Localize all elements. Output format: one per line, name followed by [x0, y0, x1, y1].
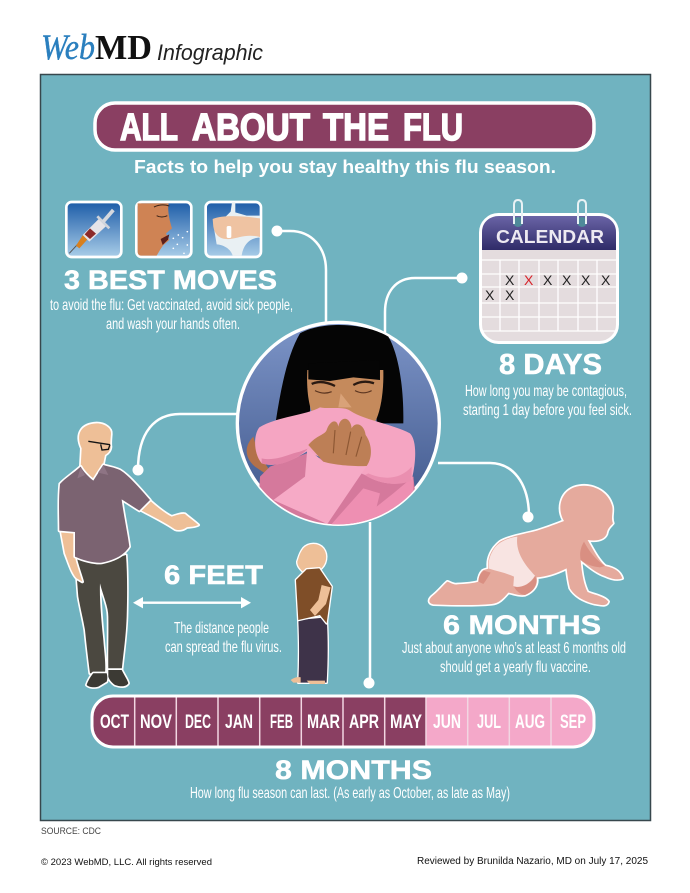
body: [259, 453, 415, 524]
logo: WebMD Infographic: Infographic: [157, 40, 263, 65]
face: [307, 370, 383, 422]
child head: [297, 544, 326, 573]
footer: copyright: © 2023 WebMD, LLC. All rights reserved: [41, 857, 212, 868]
text: 6 feet description: can spread the flu virus.: [165, 639, 282, 656]
arrow: six feet distance: [133, 597, 251, 608]
month bar: APR: [349, 712, 379, 733]
text: 6 feet description: The distance people: [174, 620, 269, 637]
source: SOURCE: CDC: [41, 826, 101, 837]
calendar: X: [543, 272, 553, 288]
text: 6 months description: should get a yearly flu vaccine.: [440, 659, 591, 676]
hair: [276, 325, 403, 423]
month bar: OCT: [100, 712, 129, 733]
month bar: MAR: [307, 712, 340, 733]
sleeve: [255, 407, 415, 484]
man head: [79, 423, 111, 481]
icon: syringe: [66, 202, 121, 257]
connector dots: [132, 226, 534, 688]
illustration: crawling baby: [429, 486, 622, 605]
logo: WebMD Infographic: Web: [41, 27, 95, 67]
title banner: [95, 103, 594, 150]
month bar: AUG: [515, 712, 545, 733]
title banner: FLU: [403, 107, 463, 149]
title banner: ABOUT: [192, 107, 310, 149]
heading: 8 months: 8 MONTHS: [275, 755, 432, 785]
child shirt: [296, 568, 332, 623]
calendar: X: [505, 272, 515, 288]
child legs: [298, 617, 328, 683]
month bar: MAY: [390, 712, 422, 733]
child arm: [310, 585, 331, 616]
footer: review credit: Reviewed by Brunilda Nazario, MD on July 17, 2025: [417, 856, 648, 867]
fingers hand: [308, 419, 371, 466]
month bar: JAN: [225, 712, 253, 733]
calendar: CALENDAR: [496, 227, 604, 247]
text: 6 months description: [402, 640, 626, 676]
subtitle: Facts to help you stay healthy this flu season.: [134, 157, 556, 177]
heading: 6 months: 6 MONTHS: [443, 610, 601, 640]
month bar: NOV: [140, 712, 172, 733]
calendar: X: [601, 272, 611, 288]
calendar: [480, 200, 618, 342]
calendar: X: [524, 272, 534, 288]
text: 8 days description: [463, 383, 632, 419]
title banner: ALL: [120, 107, 178, 149]
logo: WebMD Infographic: [41, 27, 263, 67]
illustration: tall man pointing: [59, 423, 332, 687]
man legs: [75, 555, 127, 673]
logo: WebMD Infographic: MD: [95, 28, 152, 67]
heading: 6 feet: 6 FEET: [164, 560, 264, 590]
panel: background: [40, 74, 650, 820]
child feet: [291, 677, 325, 684]
man arms: [61, 501, 198, 582]
text: best moves description: and wash your hands often.: [106, 316, 240, 333]
man shoes: [87, 670, 128, 687]
calendar: X: [581, 272, 591, 288]
text: best moves description: to avoid the flu: Get vaccinated, avoid sick people,: [50, 297, 293, 314]
connector lines: [138, 231, 529, 683]
heading: 8 days: 8 DAYS: [499, 349, 602, 381]
title banner: THE: [323, 107, 389, 149]
man shirt: [59, 465, 150, 563]
baby shading: [478, 542, 605, 595]
month bar: JUL: [477, 712, 501, 733]
left hand: [247, 437, 268, 473]
text: best moves description: [50, 297, 293, 333]
month bar: SEP: [560, 712, 586, 733]
month bar: [92, 696, 594, 747]
month bar: JUN: [433, 712, 461, 733]
month bar: FEB: [270, 712, 293, 733]
icons: three best moves: [66, 202, 261, 257]
calendar: X: [562, 272, 572, 288]
forearm: [273, 448, 367, 524]
text: 8 months description: How long flu season can last. (As early as October, as late as May): [190, 785, 510, 802]
calendar: X: [485, 287, 495, 303]
calendar: X: [505, 287, 515, 303]
heading: 3 best moves: 3 BEST MOVES: [64, 265, 277, 295]
month bar: DEC: [185, 712, 211, 733]
icon: hand washing: [206, 202, 261, 257]
diaper: [489, 537, 535, 587]
illustration: person sneezing into elbow: [237, 322, 439, 533]
text: 6 feet description: [165, 620, 282, 656]
icon: sneeze: [136, 202, 191, 257]
